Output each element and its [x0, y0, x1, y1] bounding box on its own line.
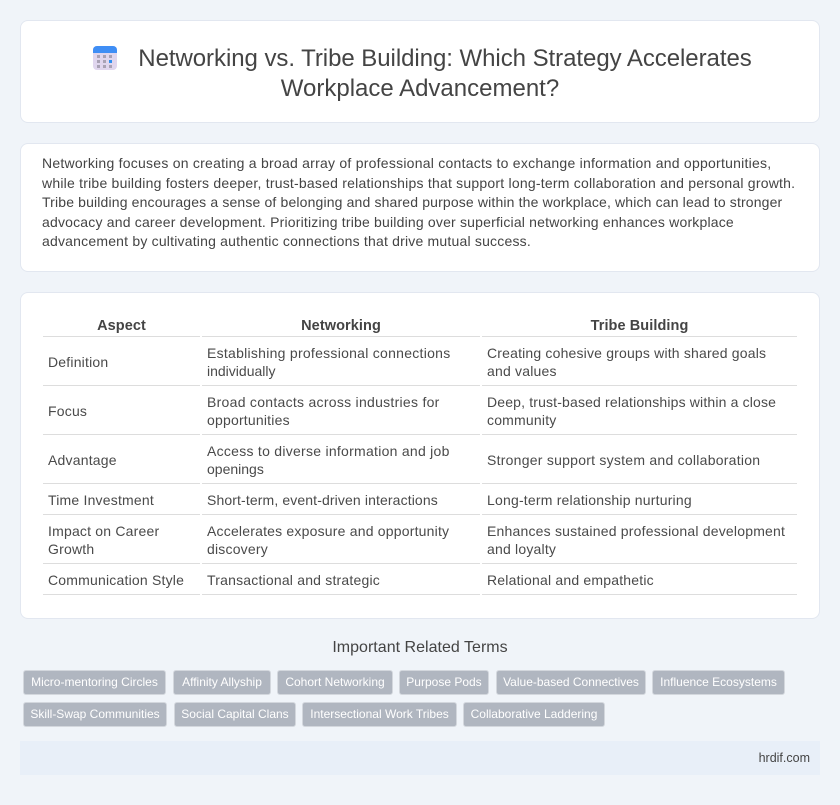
- intro text: advancement by cultivating authentic connections that drive mutual success.: [42, 233, 531, 249]
- intro text: Networking focuses on creating a broad array of professional contacts to exchange information and opportunities,: [42, 155, 771, 171]
- comparison table: community: [487, 412, 556, 428]
- title: Workplace Advancement?: [281, 75, 559, 102]
- comparison table: individually: [207, 363, 275, 379]
- row: definition: Definition: [48, 354, 108, 370]
- comparison table: openings: [207, 461, 264, 477]
- footer bar: [20, 741, 820, 775]
- header card: [20, 20, 820, 123]
- tag: Collaborative Laddering: [471, 707, 597, 721]
- row: impact on career growth: [48, 523, 159, 557]
- tag: [496, 670, 646, 695]
- tag: [399, 670, 489, 695]
- tag: Purpose Pods: [406, 675, 482, 689]
- row: communication style: Communication Style: [48, 572, 184, 588]
- comparison table: Short-term, event-driven interactions: [207, 492, 438, 508]
- tag: [652, 670, 785, 695]
- tag: [23, 670, 166, 695]
- table header: tribe building: Tribe Building: [591, 318, 688, 334]
- row: impact on career growth: Growth: [48, 541, 94, 557]
- row: focus: Focus: [48, 403, 87, 419]
- tag: [463, 702, 605, 727]
- related terms heading: Important Related Terms: [332, 639, 508, 656]
- tag: Micro-mentoring Circles: [31, 675, 158, 689]
- tag: Intersectional Work Tribes: [310, 707, 449, 721]
- tag: Skill-Swap Communities: [30, 707, 160, 721]
- table header: aspect: Aspect: [97, 318, 146, 334]
- tag: [277, 670, 393, 695]
- table header: networking: Networking: [301, 318, 381, 334]
- tag: Cohort Networking: [285, 675, 385, 689]
- tag: [174, 702, 296, 727]
- row: impact on career growth: Impact on Career: [48, 523, 159, 539]
- comparison table: Enhances sustained professional development: [487, 523, 785, 539]
- comparison table: Accelerates exposure and opportunity: [207, 523, 449, 539]
- comparison table: Deep, trust-based relationships within a close: [487, 394, 776, 410]
- tag: [23, 702, 167, 727]
- row: advantage: Advantage: [48, 452, 117, 468]
- comparison table: Creating cohesive groups with shared goals: [487, 345, 766, 361]
- icon: calendar: [93, 46, 117, 70]
- title: [138, 45, 752, 102]
- title: Networking vs. Tribe Building: Which Strategy Accelerates: [138, 45, 752, 72]
- tag: [302, 702, 457, 727]
- comparison table: Establishing professional connections: [207, 345, 450, 361]
- comparison table: Access to diverse information and job: [207, 443, 450, 459]
- comparison table: opportunities: [207, 412, 290, 428]
- comparison table: Stronger support system and collaboration: [487, 452, 760, 468]
- comparison table: discovery: [207, 541, 268, 557]
- intro panel: [20, 143, 820, 272]
- intro text: Tribe building encourages a sense of belonging and shared purpose within the workplace, which can lead to stronger: [42, 194, 782, 210]
- tag: Social Capital Clans: [181, 707, 289, 721]
- comparison table: and loyalty: [487, 541, 556, 557]
- comparison table: Broad contacts across industries for: [207, 394, 440, 410]
- comparison table: Long-term relationship nurturing: [487, 492, 692, 508]
- tag: [173, 670, 271, 695]
- comparison table panel: [20, 292, 820, 619]
- comparison table: Relational and empathetic: [487, 572, 654, 588]
- tag: Affinity Allyship: [182, 675, 262, 689]
- intro text: [42, 155, 795, 249]
- intro text: advocacy and career development. Prioritizing tribe building over superficial networking enhances workplace: [42, 214, 734, 230]
- tag: Influence Ecosystems: [660, 675, 777, 689]
- row: time investment: Time Investment: [48, 492, 154, 508]
- comparison table: and values: [487, 363, 557, 379]
- comparison table: Transactional and strategic: [207, 572, 380, 588]
- intro text: while tribe building fosters deeper, trust-based relationships that support long-term collaboration and personal growth.: [42, 175, 795, 191]
- tag: Value-based Connectives: [503, 675, 639, 689]
- footer source: hrdif.com: [759, 751, 810, 765]
